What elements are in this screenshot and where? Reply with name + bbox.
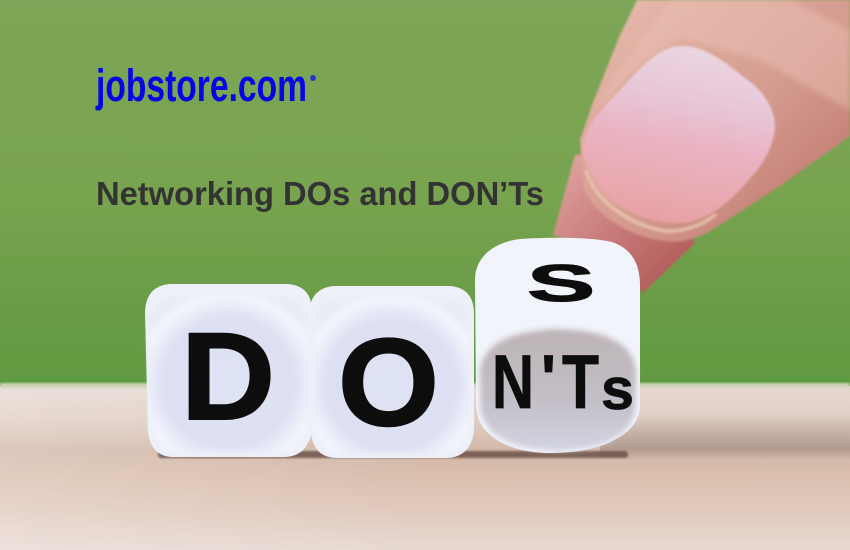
nail tip rim (586, 170, 716, 231)
registered mark (310, 75, 316, 81)
letter O: O (338, 314, 439, 452)
letters N'Ts on front face (492, 340, 634, 425)
back finger (553, 150, 695, 293)
die: O (309, 286, 474, 458)
green photo background (0, 0, 850, 388)
die: S over N'Ts (475, 238, 640, 453)
wooden table (0, 383, 850, 550)
die: D (145, 284, 312, 457)
thumb (580, 0, 850, 242)
letters N'Ts on front face: T (562, 340, 599, 425)
logo: jobstore.com: jobstore.com (95, 60, 307, 111)
letter s on top face: S (527, 255, 595, 313)
thumbnail (582, 46, 775, 223)
title: Networking DOs and DON’Ts (96, 175, 544, 212)
letters N'Ts on front face: ' (541, 341, 556, 415)
dice shadow on table (158, 451, 628, 458)
shaded front face (480, 329, 636, 451)
hand: finger and thumb (553, 0, 850, 293)
letters N'Ts on front face: s (601, 357, 634, 422)
skin highlight (595, 0, 850, 110)
letter D: D (181, 308, 275, 446)
letters N'Ts on front face: N (492, 340, 534, 425)
